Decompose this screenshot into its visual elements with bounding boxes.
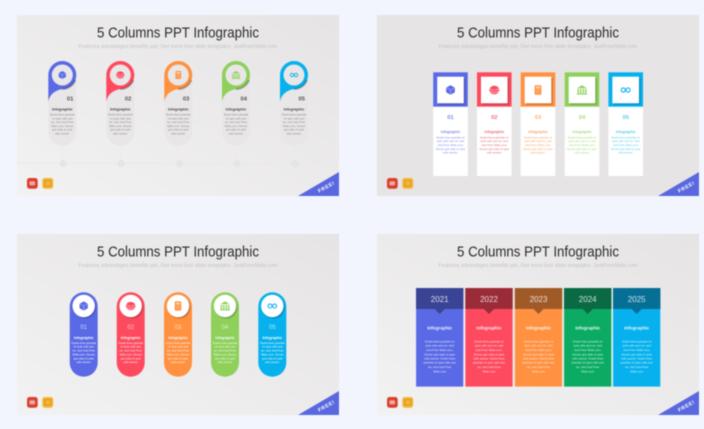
column 02: Duels lines gravida — [118, 341, 143, 345]
column 04: odio auctor. — [229, 132, 244, 136]
column 04: gra vida mi quis — [226, 128, 247, 132]
icon: Google Slides — [402, 397, 413, 408]
column 2025: odio auctor. Duels lines — [621, 356, 653, 360]
column 01: odio auctor. — [55, 132, 70, 136]
column 01: Just Free Slide.com, — [437, 143, 464, 147]
column 2024: 2024 — [579, 295, 597, 304]
column 05: gra vida mi quis — [284, 128, 305, 132]
icon: PowerPoint — [387, 397, 398, 408]
column 02 — [117, 292, 145, 377]
column 2024: quis odio aus tor, sed — [574, 344, 602, 348]
column 04: tor, sed Just Free — [225, 120, 248, 124]
column 2024: Infographic — [575, 326, 601, 331]
column 2021: Infographic — [427, 326, 453, 331]
column 01: Slide.com, Donec — [72, 353, 96, 357]
column 02: Infographic — [121, 336, 140, 340]
column 2025: quis odio aus tor, sed — [623, 344, 651, 348]
column 2022: odio auctor. Duels lines — [473, 356, 505, 360]
column 03: tor, sed Just Free — [167, 349, 190, 353]
column 03: Duels lines gravida — [166, 112, 191, 116]
column 2021: 2021 — [431, 295, 449, 304]
column 04: 04 — [579, 115, 586, 121]
title: 5 Columns PPT Infographic — [457, 25, 619, 41]
column 2025: Duels lines gravida mi — [622, 339, 652, 343]
ribbon: free: FREE! — [317, 399, 336, 414]
column 04: mi quis odio aus — [215, 345, 236, 349]
column 02: 02 — [491, 115, 498, 121]
ribbon: free: FREE! — [677, 399, 696, 414]
column 01 — [48, 61, 76, 167]
column 01: gra vida mi quis — [74, 356, 94, 360]
column 2023: Just Free Slide.com, — [525, 348, 552, 352]
column 02: Duels lines gravida mi — [480, 135, 509, 139]
panel: slide 3 capsule columns — [17, 234, 339, 415]
column 2022: Just Free Slide.com, — [475, 348, 503, 352]
column 02: Infographic — [110, 107, 131, 111]
column 04: Slide.com, Donec — [225, 124, 248, 128]
column 05: Infographic — [284, 107, 304, 111]
column 01: odio auctor. — [76, 360, 91, 364]
column 04: gra vida mi quis — [215, 356, 236, 360]
column 05: Duels lines gravida mi — [612, 135, 640, 139]
ribbon: free — [298, 172, 339, 196]
subtitle: Features advantages benefits ppt, Get more free slide templates: JustFreeSlide.com — [438, 263, 638, 269]
title: 5 Columns PPT Infographic — [457, 244, 619, 260]
column 01: 01 — [447, 115, 454, 121]
column 03: gra vida mi quis — [168, 356, 189, 360]
column 05: 05 — [269, 325, 276, 331]
column 2023: odio auctor. Duels lines — [523, 356, 555, 360]
column 03: Slide.com, Donec — [167, 124, 190, 128]
column 2022: quis odio aus tor, sed — [475, 344, 504, 348]
column 02: Slide.com, Donec — [119, 353, 143, 357]
column 04: odio auctor. — [218, 360, 233, 364]
subtitle: Features advantages benefits ppt, Get more free slide templates: JustFreeSlide.com — [438, 44, 638, 50]
column 2022: Donec gra vida mi quis — [474, 352, 505, 356]
column 02: tor, sed Just Free — [120, 349, 142, 353]
column 03: odio auctor. — [171, 360, 186, 364]
column 05: Slide.com, Donec — [283, 124, 306, 128]
column 2021: odio auctor. Duels lines — [424, 356, 456, 360]
ribbon: free: FREE! — [317, 180, 336, 195]
column 2025: tor, sed Just Free — [625, 365, 649, 369]
ribbon: free — [658, 172, 699, 196]
column 04: Duels lines gravida mi — [568, 135, 596, 139]
column 04: Duels lines gravida — [213, 341, 238, 345]
column 2023: tor, sed Just Free — [527, 365, 550, 369]
column 2021: quis odio aus tor, sed — [426, 344, 454, 348]
column 05: gra vida mi quis — [262, 356, 283, 360]
column 03: Infographic — [528, 130, 548, 134]
column 2022: tor, sed Just Free — [477, 365, 501, 369]
column 05: mi quis odio aus — [262, 345, 283, 349]
ribbon: free — [298, 391, 339, 415]
column 2023: gravida mi quis odio auc — [522, 361, 555, 365]
column 05: 05 — [299, 96, 306, 102]
subtitle: Features advantages benefits ppt, Get more free slide templates: JustFreeSlide.com — [78, 44, 278, 50]
column 2022: 2022 — [480, 295, 498, 304]
column 02: tor, sed Just Free — [109, 120, 132, 124]
column 01: Duels lines gravida mi — [436, 135, 465, 139]
column 04: Donec gra vida mi quis — [567, 147, 597, 151]
column 03: Just Free Slide.com, — [525, 143, 551, 147]
column 2021: gravida mi quis odio auc — [424, 361, 456, 365]
column 05: Duels lines gravida — [282, 112, 307, 116]
column 2021: tor, sed Just Free — [428, 365, 452, 369]
column 2024: Slide.com — [581, 369, 595, 373]
column 02: Just Free Slide.com, — [481, 143, 508, 147]
column 04: Duels lines gravida — [224, 112, 249, 116]
column 2025: Slide.com — [630, 369, 644, 373]
column 01: tor, sed Just Free — [73, 349, 95, 353]
column 2022: Duels lines gravida mi — [474, 339, 504, 343]
column 2024: odio auctor. Duels lines — [572, 356, 604, 360]
column 2023: Slide.com — [532, 369, 546, 373]
column 03: Duels lines gravida mi — [524, 135, 552, 139]
column 04: quis odio aus tor, sed — [568, 139, 596, 143]
panel: slide 1 pin columns — [17, 15, 339, 196]
column 04: Infographic — [215, 336, 235, 340]
column 2023 — [515, 288, 562, 387]
column 05 — [258, 292, 286, 377]
column 2021: Duels lines gravida mi — [425, 339, 455, 343]
icon: Google Slides — [42, 397, 53, 408]
column 01: mi quis odio aus — [73, 345, 95, 349]
column 2021: Slide.com — [433, 369, 447, 373]
column 2024: Just Free Slide.com, — [574, 348, 602, 352]
column 2024: Duels lines gravida mi — [573, 339, 603, 343]
ribbon: free: FREE! — [677, 180, 696, 195]
column 2021: Donec gra vida mi quis — [424, 352, 455, 356]
column 02: 02 — [127, 325, 135, 331]
column 03: Slide.com, Donec — [167, 353, 190, 357]
column 03: Donec gra vida mi quis — [523, 147, 553, 151]
column 03: odio auctor. — [171, 132, 186, 136]
column 03: mi quis odio aus — [168, 345, 189, 349]
column 04: mi quis odio aus — [226, 116, 247, 120]
column 05: tor, sed Just Free — [261, 349, 284, 353]
column 03: quis odio aus tor, sed — [524, 139, 552, 143]
column 2022: Infographic — [476, 326, 502, 331]
column 01 — [70, 292, 98, 377]
column 05 — [608, 72, 643, 176]
column 01: mi quis odio aus — [52, 116, 73, 120]
column 01: tor, sed Just Free — [51, 120, 74, 124]
column 2023: quis odio aus tor, sed — [524, 344, 553, 348]
column 02: quis odio aus tor, sed — [481, 139, 508, 143]
column 2025 — [613, 288, 660, 387]
column 2021 — [416, 288, 463, 387]
column 02: odio auctor. — [113, 132, 128, 136]
column 05: quis odio aus tor, sed — [612, 139, 640, 143]
column 2024: Donec gra vida mi quis — [572, 352, 603, 356]
column 01 — [433, 72, 468, 176]
column 05: Duels lines gravida — [260, 341, 285, 345]
column 2024: tor, sed Just Free — [576, 365, 600, 369]
column 03 — [164, 61, 192, 167]
column 03: 03 — [183, 96, 190, 102]
column 01: 01 — [67, 96, 74, 102]
column 01: Infographic — [74, 336, 93, 340]
column 04: Infographic — [226, 107, 246, 111]
column 2025: Donec gra vida mi quis — [621, 352, 652, 356]
column 05: 05 — [622, 115, 630, 121]
column 03: 03 — [535, 115, 542, 121]
column 02: odio auctor. — [123, 360, 138, 364]
column 03: mi quis odio aus — [168, 116, 189, 120]
column 03: Duels lines gravida — [166, 341, 191, 345]
column 05: Just Free Slide.com, — [613, 143, 639, 147]
column 04 — [222, 61, 250, 167]
column 01: odio auctor. — [443, 151, 458, 155]
panel: slide 4 yearly columns — [377, 234, 699, 415]
column 02: Infographic — [485, 130, 504, 134]
column 02: gra vida mi quis — [121, 356, 141, 360]
column 2024: gravida mi quis odio auc — [572, 361, 604, 365]
column 05: Infographic — [263, 336, 282, 340]
column 2023: Duels lines gravida mi — [524, 339, 553, 343]
column 02 — [106, 61, 134, 167]
column 01: gra vida mi quis — [52, 128, 73, 132]
icon: PowerPoint — [387, 178, 398, 189]
column 04: Infographic — [572, 130, 592, 134]
column 05 — [280, 61, 308, 167]
column 03: tor, sed Just Free — [167, 120, 190, 124]
column 03: Infographic — [168, 336, 188, 340]
column 04 — [565, 72, 599, 176]
column 04 — [211, 292, 239, 377]
column 01: Duels lines gravida — [71, 341, 96, 345]
column 2025: Infographic — [624, 326, 650, 331]
column 2023: Donec gra vida mi quis — [523, 352, 554, 356]
column 04: 04 — [241, 96, 248, 102]
column 02: gra vida mi quis — [110, 128, 131, 132]
column 02: odio auctor. — [487, 151, 502, 155]
column 05: mi quis odio aus — [284, 116, 305, 120]
icon: Google Slides — [402, 178, 413, 189]
column 02: mi quis odio aus — [120, 345, 142, 349]
column 05: Infographic — [616, 130, 635, 134]
column 02 — [477, 72, 512, 176]
column 2023: Infographic — [526, 326, 551, 331]
column 05: odio auctor. — [287, 132, 302, 136]
column 04: Slide.com, Donec — [214, 353, 237, 357]
column 02: mi quis odio aus — [110, 116, 131, 120]
column 04: tor, sed Just Free — [214, 349, 237, 353]
column 05: odio auctor. — [618, 151, 633, 155]
column 03: gra vida mi quis — [168, 128, 189, 132]
column 04: Just Free Slide.com, — [569, 143, 595, 147]
column 2025: gravida mi quis odio auc — [621, 361, 653, 365]
column 2024 — [564, 288, 611, 387]
icon: Google Slides — [42, 178, 53, 189]
column 03: odio auctor. — [531, 151, 546, 155]
column 2021: Just Free Slide.com, — [426, 348, 454, 352]
column 2025: 2025 — [628, 295, 646, 304]
column 03 — [164, 292, 192, 377]
column 01: Duels lines gravida — [50, 112, 75, 116]
title: 5 Columns PPT Infographic — [97, 25, 259, 41]
icon: PowerPoint — [27, 178, 38, 189]
column 2023: 2023 — [530, 295, 548, 304]
column 2022: Slide.com — [482, 369, 496, 373]
column 01: Slide.com, Donec — [51, 124, 74, 128]
column 03: 03 — [175, 325, 182, 331]
column 03: Infographic — [168, 107, 189, 111]
column 2022 — [465, 288, 513, 387]
column 01: Donec gra vida mi quis — [436, 147, 466, 151]
column 03 — [521, 72, 555, 176]
subtitle: Features advantages benefits ppt, Get more free slide templates: JustFreeSlide.com — [78, 263, 278, 269]
column 01: Infographic — [52, 107, 73, 111]
title: 5 Columns PPT Infographic — [97, 244, 259, 260]
column 05: odio auctor. — [265, 360, 280, 364]
column 02: Duels lines gravida — [108, 112, 133, 116]
column 02: Donec gra vida mi quis — [480, 147, 510, 151]
column 01: 01 — [80, 325, 88, 331]
column 2022: gravida mi quis odio auc — [473, 361, 506, 365]
ribbon: free — [658, 391, 699, 415]
column 04: 04 — [222, 325, 229, 331]
column 01: quis odio aus tor, sed — [437, 139, 465, 143]
column 01: Infographic — [441, 130, 460, 134]
panel: slide 2 square columns — [377, 15, 699, 196]
column 05: Slide.com, Donec — [261, 353, 284, 357]
column 2025: Just Free Slide.com, — [623, 348, 651, 352]
column 02: Slide.com, Donec — [109, 124, 132, 128]
column 04: odio auctor. — [575, 151, 590, 155]
column 05: tor, sed Just Free — [283, 120, 306, 124]
column 05: Donec gra vida mi quis — [611, 147, 641, 151]
column 02: 02 — [125, 96, 131, 102]
icon: PowerPoint — [27, 397, 38, 408]
